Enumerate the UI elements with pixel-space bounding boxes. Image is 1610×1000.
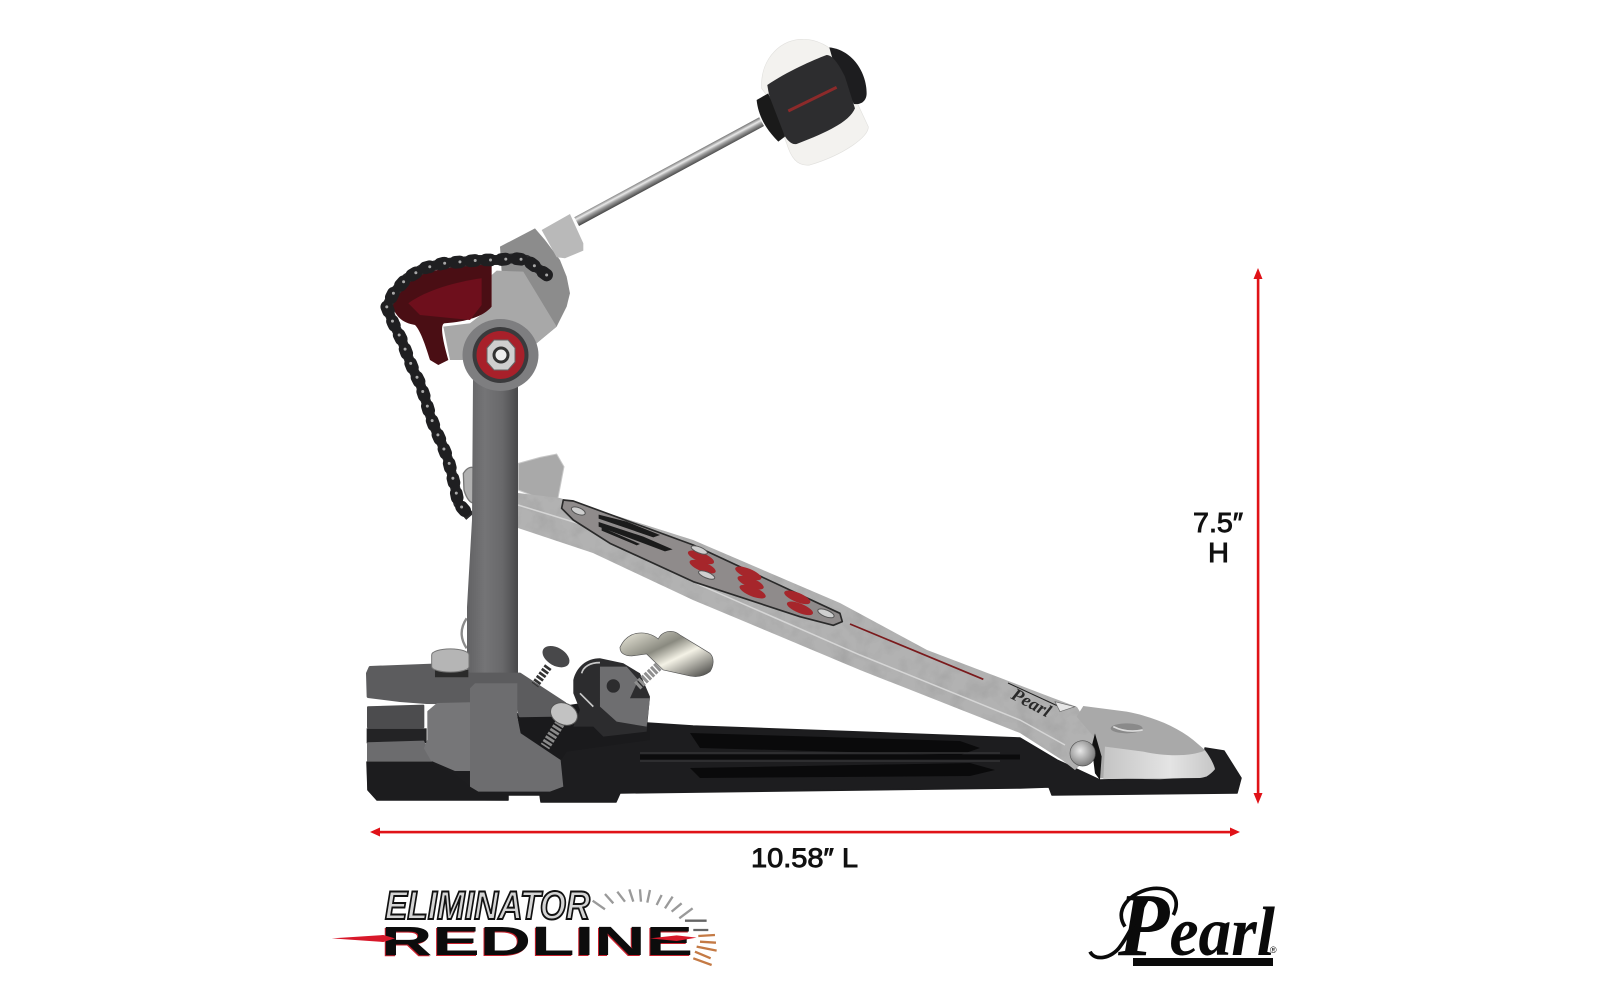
black beater head [767,55,855,144]
bottom black base [367,762,508,801]
beater hub [757,93,785,142]
upper spring screw [535,667,548,685]
beater shaft [577,122,762,222]
base casting [367,631,713,801]
Eliminator Redline logo [332,884,717,965]
red accent line [850,624,983,679]
lower clamp [368,742,432,761]
foot board arm [518,454,1100,770]
vertical dimension arrow [1254,268,1262,804]
pivot head [462,319,538,391]
wing key [620,631,713,677]
hinge pin [1070,741,1095,766]
knurled knob [435,670,468,677]
heel bracket [518,454,564,505]
redline wordmark: REDLINE [381,918,693,964]
Pearl wordmark: Pearl [1117,876,1276,975]
height label value: 7.5″ [1193,507,1243,538]
column [462,380,518,690]
silver plate [443,271,557,360]
length label: 10.58″ L [751,843,858,873]
underline bar [1133,958,1273,966]
shaft clamp [542,214,583,258]
red cam [390,263,492,365]
column tube [467,380,518,690]
height label unit: H [1208,537,1229,568]
script flourish [1090,888,1176,958]
registered mark: ® [1270,945,1277,955]
inlay plate [562,500,842,625]
cam and bracket [390,214,583,365]
rear roller [463,467,477,503]
lower spring screw [545,723,560,747]
rear clip [462,618,467,648]
arm logo: Pearl [1007,683,1055,721]
arm logo line [1008,683,1060,707]
Pearl logo [1090,876,1277,975]
beater red stripe [788,87,837,111]
eliminator wordmark: ELIMINATOR [385,884,590,928]
hoop clamp jaw [367,665,565,716]
gauge ticks [593,889,717,965]
base plate [367,723,1241,802]
lower jaw [368,706,423,727]
white felt beater face [762,39,868,165]
horizontal dimension arrow [370,828,1240,836]
wing stem [637,663,662,687]
drive chain [387,258,547,517]
chrome cam mount [573,658,650,737]
black strip [367,728,427,743]
column foot [470,683,563,792]
rear bracket [500,228,570,343]
pedal illustration [367,39,1241,802]
cam inner highlight [408,278,482,320]
arm body [518,493,1100,770]
beater assembly [577,39,868,222]
toe plate and hinge [1055,702,1215,780]
red needles [332,935,697,942]
clamp body [425,703,470,770]
black area behind mount [517,703,650,762]
black beater cap [829,47,867,104]
arm highlight [518,505,1065,745]
